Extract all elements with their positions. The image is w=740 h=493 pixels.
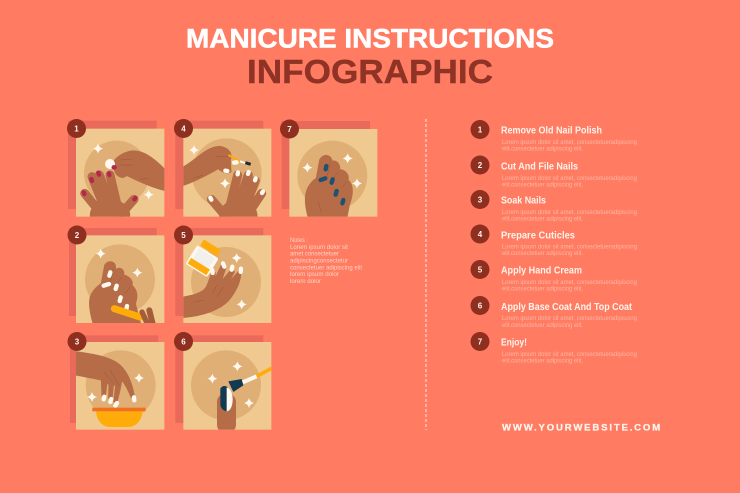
badge: 4: 4 (181, 124, 186, 134)
list item 5 (470, 260, 637, 292)
panel: step 2 cut and file (69, 228, 164, 324)
notes text: Lorem ipsum dolor sit (290, 244, 348, 251)
list item 3 (470, 190, 637, 222)
notes text (290, 237, 362, 285)
list item 7 (470, 332, 637, 364)
list item 5: Apply Hand Cream (501, 264, 582, 276)
list item 3: Soak Nails (501, 194, 546, 206)
badge: 1: 1 (74, 124, 79, 134)
badge: 6: 6 (181, 338, 186, 346)
list item 3: 3 (478, 196, 483, 204)
list item 1 (470, 120, 637, 152)
list item 7: 7 (478, 338, 483, 346)
badge: 5: 5 (181, 231, 186, 240)
list item 1: 1 (478, 126, 483, 134)
badge: 3 (68, 332, 86, 351)
list item 4 (470, 224, 637, 257)
list item 2: Lorem ipsum dolor sit amet, consectetueradipiscing (502, 175, 637, 182)
list item 2: Cut And File Nails (501, 160, 578, 172)
list item 1: Lorem ipsum dolor sit amet, consectetueradipiscing (502, 139, 637, 146)
list item 6: elit.consectetuer adipiscing elit. (502, 322, 583, 329)
list item 6 (470, 296, 637, 329)
badge: 7: 7 (287, 125, 292, 134)
panel: step 6 base coat and top coat (175, 335, 273, 433)
title (186, 24, 554, 90)
badge: 5 (174, 226, 193, 244)
title: INFOGRAPHIC (247, 53, 493, 90)
list item 7: Enjoy! (501, 336, 527, 348)
title: MANICURE INSTRUCTIONS (186, 24, 554, 54)
list item 5: Lorem ipsum dolor sit amet, consectetueradipiscing (502, 279, 637, 286)
notes text: lorem dolor (290, 278, 322, 285)
badge: 1 (67, 119, 86, 138)
badge: 6 (174, 332, 193, 351)
badge: 2: 2 (75, 231, 80, 240)
list item 4: 4 (478, 230, 483, 239)
list item 7: Lorem ipsum dolor sit amet, consectetueradipiscing (502, 351, 637, 358)
notes text: amet consectetuer (290, 250, 340, 258)
list item 5: 5 (478, 266, 483, 274)
notes text: lorem ipsum dolor (290, 271, 340, 278)
panel: step 1 remove polish (68, 120, 164, 217)
list item 2: 2 (478, 161, 483, 170)
badge: 2 (68, 226, 86, 244)
list item 4: Prepare Cuticles (501, 230, 575, 242)
panel: step 4 prepare cuticles (176, 120, 272, 217)
list item 3: elit.consectetuer adipiscing elit. (502, 216, 583, 222)
badge: 3: 3 (75, 338, 80, 346)
list item 2 (470, 156, 637, 188)
list item 6: 6 (478, 302, 483, 310)
list item 2: elit.consectetuer adipiscing elit. (502, 182, 583, 188)
panel: step 5 hand cream (175, 228, 271, 323)
list item 5: elit.consectetuer adipiscing elit. (502, 286, 583, 292)
notes text: consectetuer adipiscing elit (290, 264, 362, 272)
panel: step 7 enjoy (282, 121, 377, 217)
list item 3: Lorem ipsum dolor sit amet, consectetueradipiscing (502, 209, 637, 216)
panel: step 3 soak nails (70, 335, 164, 430)
notes text: Notes : (290, 237, 308, 244)
badge: 7 (280, 120, 299, 138)
list item 6: Apply Base Coat And Top Coat (501, 301, 632, 313)
list item 4: Lorem ipsum dolor sit amet, consectetueradipiscing (502, 244, 637, 250)
notes text: adipiscingconsectetur (290, 258, 349, 264)
list item 6: Lorem ipsum dolor sit amet, consectetueradipiscing (502, 315, 637, 322)
list item 1: Remove Old Nail Polish (501, 124, 602, 136)
list item 7: elit.consectetuer adipiscing elit. (502, 358, 583, 364)
list item 4: elit.consectetuer adipiscing elit. (502, 250, 583, 257)
list item 1: elit.consectetuer adipiscing elit. (502, 146, 583, 152)
badge: 4 (174, 119, 193, 138)
website url: WWW.YOURWEBSITE.COM (502, 422, 662, 434)
